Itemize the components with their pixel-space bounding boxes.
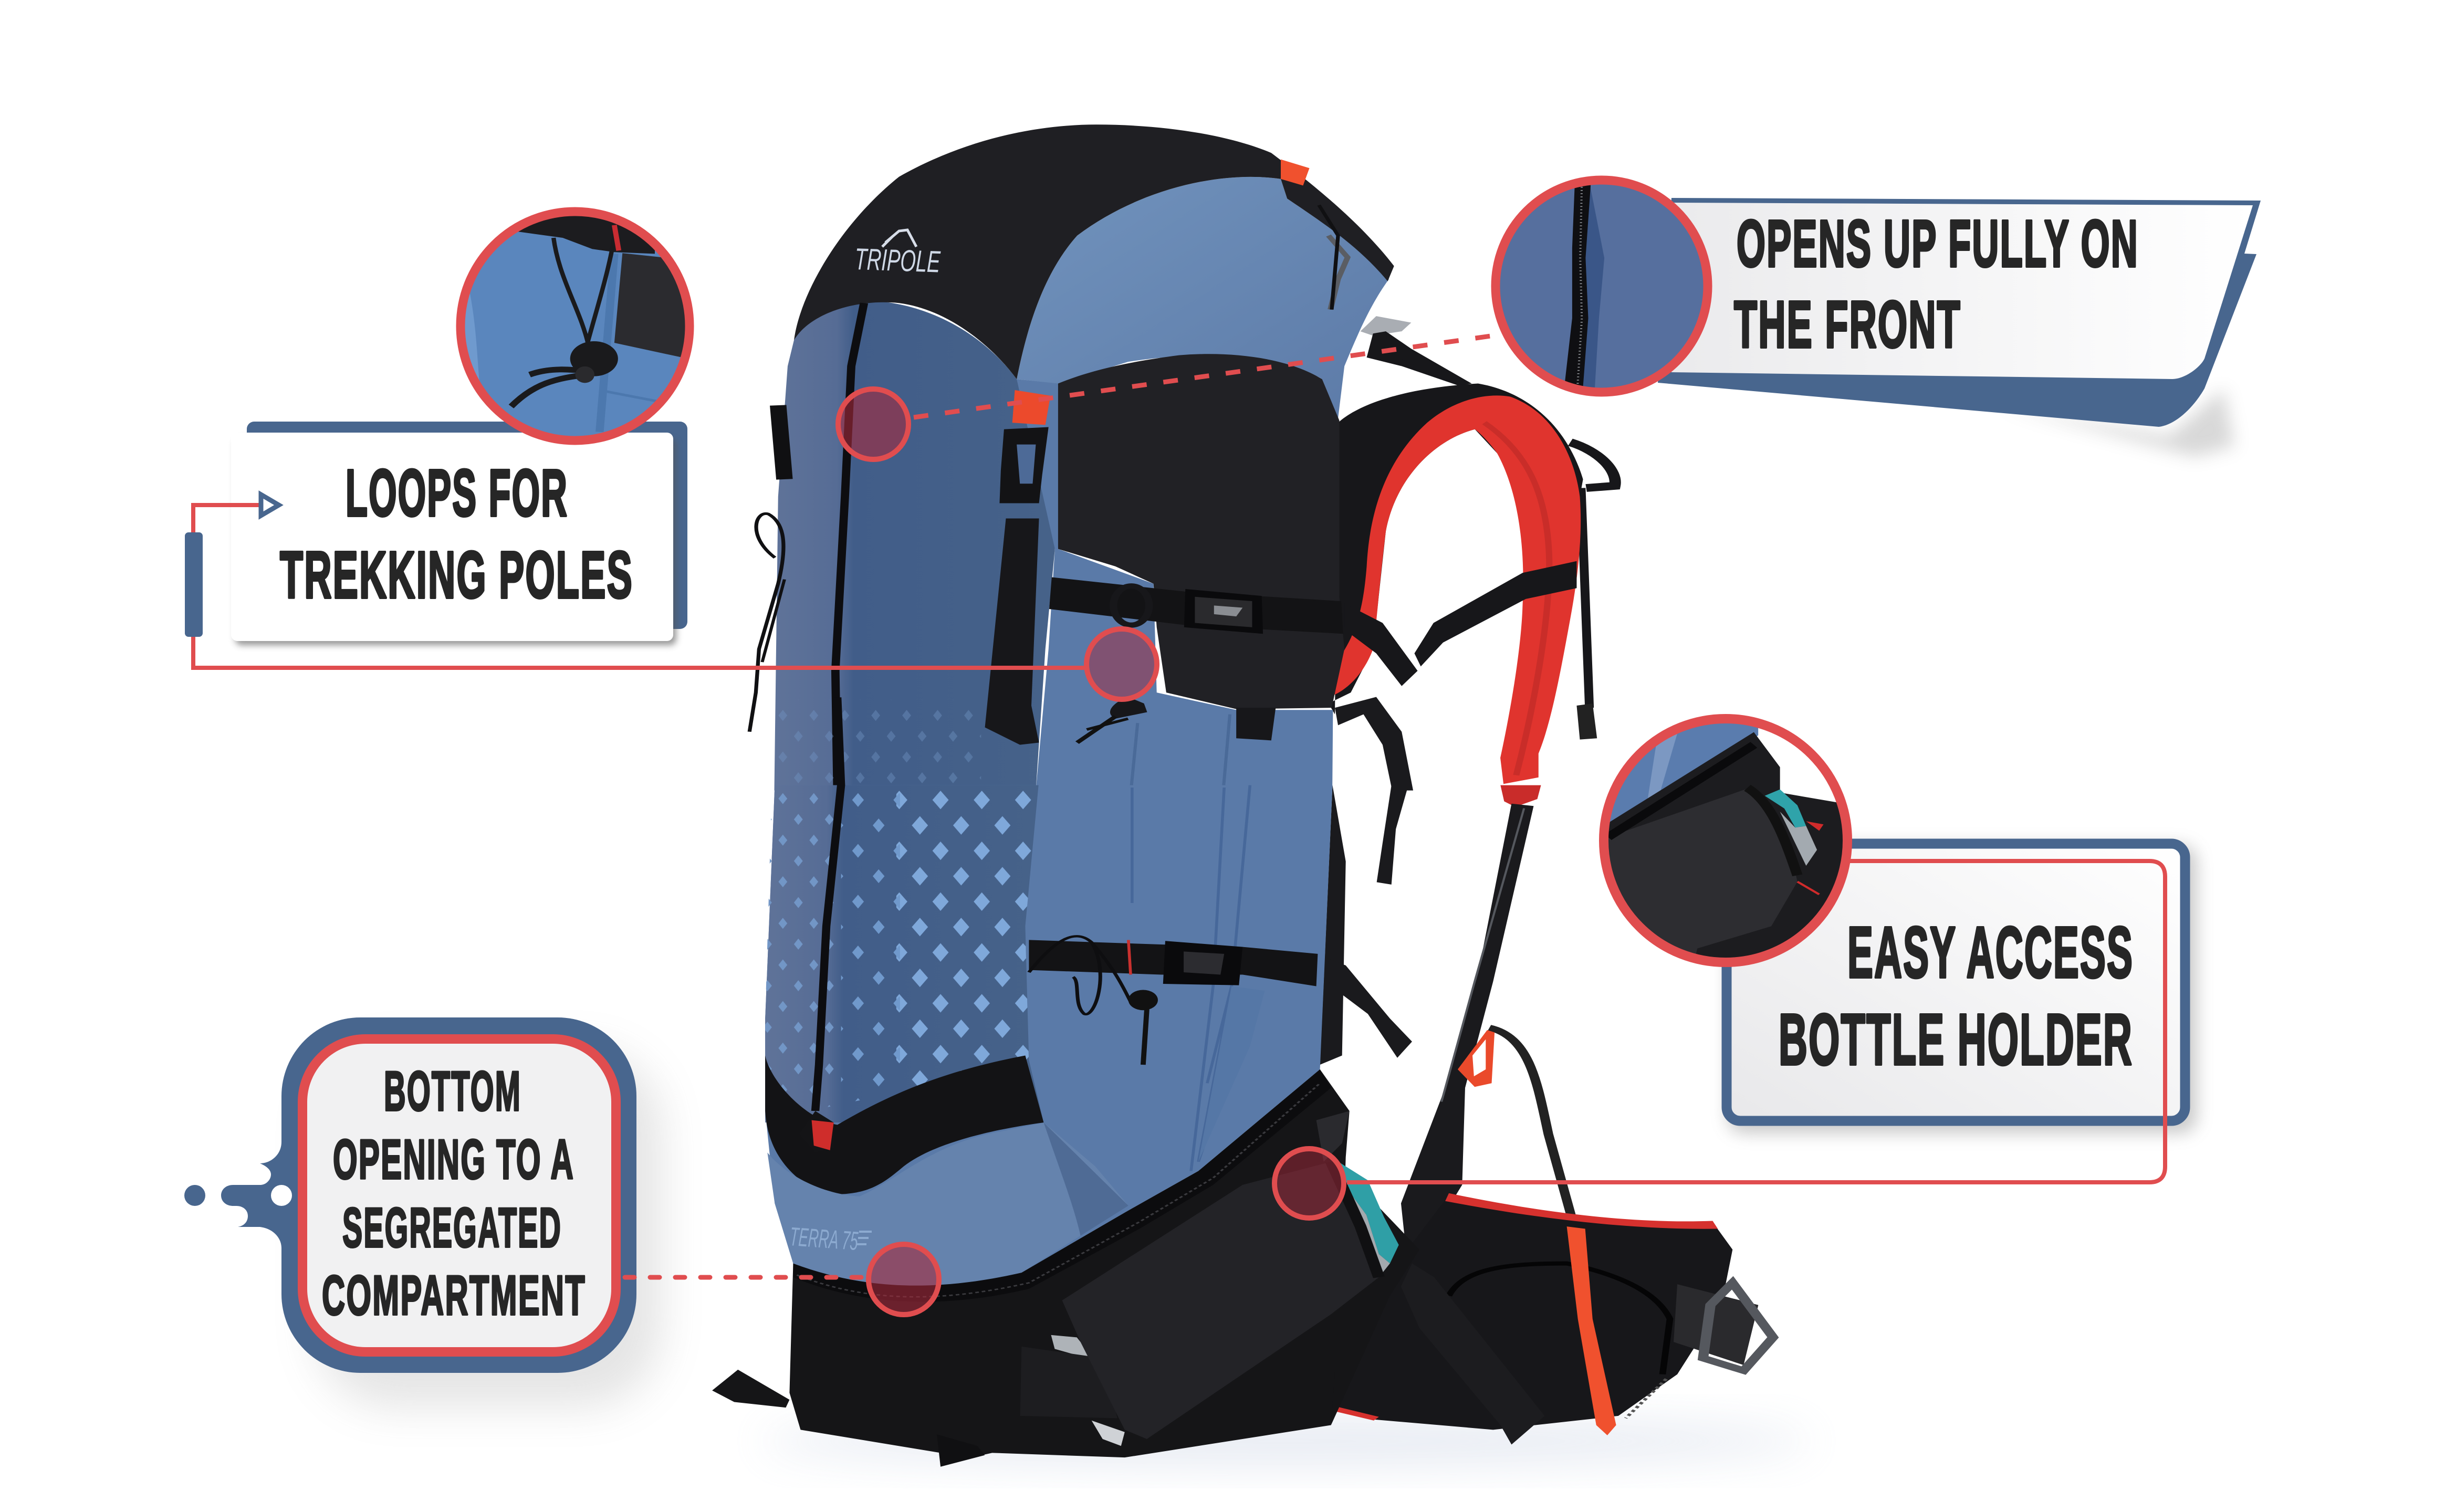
heading: opens: THE FRONT [1734, 288, 1961, 361]
box inner [302, 1039, 616, 1352]
box shadow [315, 1050, 662, 1407]
logo: Tripole [854, 230, 942, 279]
heading: bottom opening: COMPARTMENT [322, 1264, 586, 1327]
heading: bottom opening: BOTTOM [384, 1059, 521, 1122]
heading: easy access [1779, 912, 2134, 1080]
card [231, 433, 676, 645]
ribbon card [1628, 203, 2253, 379]
connector line: bottle [1347, 861, 2165, 1182]
callout: easy access bottle holder [1347, 719, 2197, 1182]
fold shadow [1995, 388, 2234, 457]
arrow [261, 495, 279, 516]
logo: Terra 75 [789, 1222, 872, 1256]
hotspot: bottom compartment [869, 1244, 939, 1315]
dashed connector: bottom compartment [625, 1275, 866, 1280]
callout: bottom opening to a segregated compartment [184, 1017, 662, 1407]
heading: loops: LOOPS FOR [346, 456, 568, 530]
dashed connector: front zipper [914, 334, 1502, 417]
bar marker [185, 532, 203, 637]
hotspot: bottle holder [1274, 1149, 1344, 1218]
logo: Terra 75: TERRA 75 [789, 1222, 859, 1256]
card backing [247, 422, 687, 629]
box frame [281, 1017, 636, 1373]
heading: loops: TREKKING POLES [280, 538, 633, 612]
callout: opens up fully on the front [1481, 174, 2261, 457]
inset: drawcord loop [456, 207, 694, 445]
heading: opens [1734, 207, 2139, 361]
hotspot: trekking pole loops [1086, 629, 1157, 699]
logo: Tripole: TRIPOLE [854, 242, 942, 279]
heading: bottom opening: SEGREGATED [342, 1196, 562, 1259]
inset: front zipper [1481, 174, 1722, 398]
card [1727, 844, 2197, 1133]
speech tab [184, 1142, 281, 1248]
callout: loops for trekking poles [185, 203, 1087, 668]
heading: loops [280, 456, 633, 612]
connector line: loops [193, 505, 1087, 668]
heading: opens: OPENS UP FULLY ON [1737, 207, 2139, 280]
backpack illustration [712, 124, 1812, 1467]
heading: bottom opening [322, 1059, 586, 1327]
heading: bottom opening: OPENING TO A [333, 1128, 574, 1191]
hotspot: front zipper [838, 389, 908, 459]
tab hole [271, 1185, 292, 1206]
heading: easy access: EASY ACCESS [1847, 912, 2134, 993]
inset: bottle pocket [1597, 719, 1854, 968]
heading: easy access: BOTTLE HOLDER [1779, 1000, 2133, 1080]
ribbon backing [1658, 198, 2261, 427]
